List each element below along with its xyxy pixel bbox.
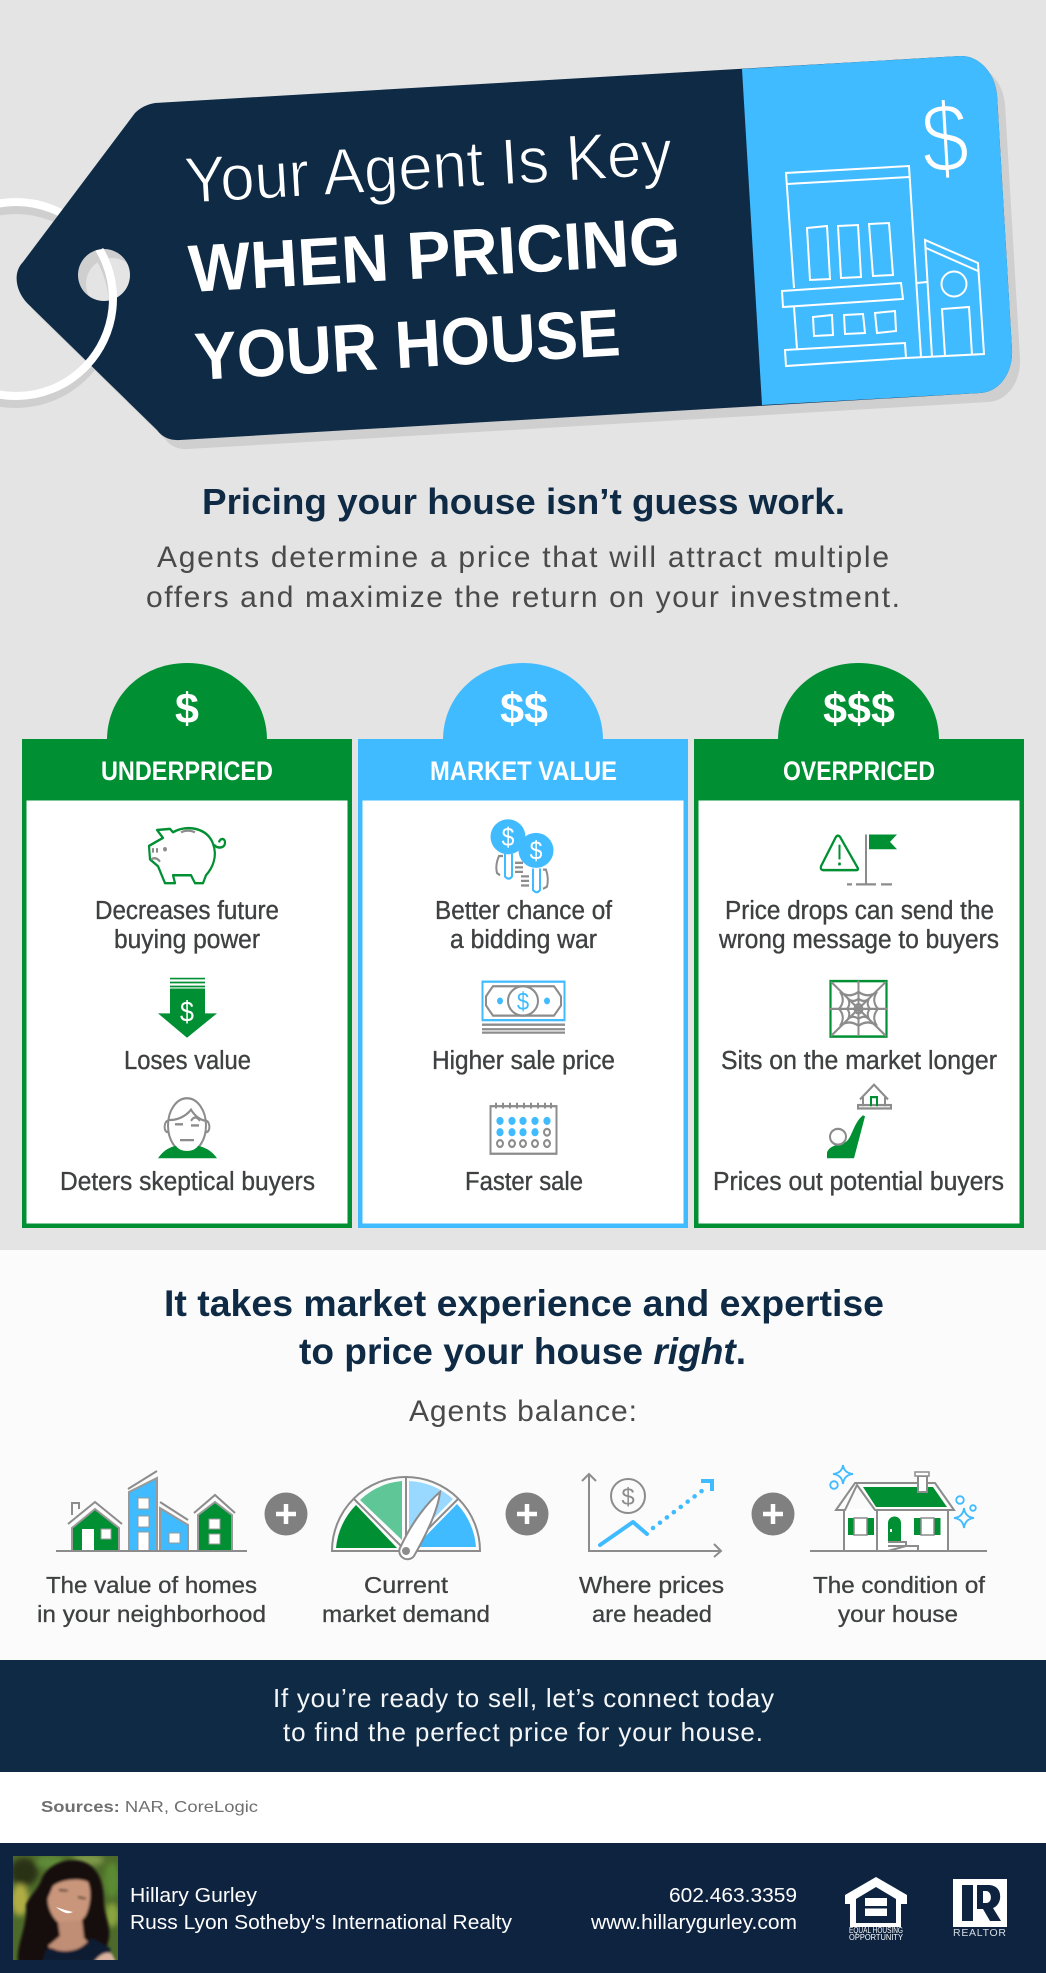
intro text: Agents determine a price that will attract multiple [157, 541, 889, 574]
factor label: The condition of [813, 1572, 986, 1598]
factor label [322, 1572, 490, 1627]
item text: a bidding war [450, 926, 597, 954]
subheading: Agents balance: [409, 1395, 637, 1428]
item text: buying power [114, 926, 260, 954]
icon: skeptical person [158, 1098, 217, 1158]
price symbol: $$ [500, 685, 548, 733]
card frame [22, 739, 352, 1228]
icon: spider web [830, 981, 887, 1037]
item text: Decreases future [95, 897, 279, 925]
icon: neighborhood homes [56, 1471, 247, 1551]
section heading: It takes market experience and expertise [164, 1283, 884, 1324]
icon: plus [264, 1492, 308, 1536]
factor label [37, 1572, 266, 1627]
card frame [358, 739, 688, 1228]
factor label [813, 1572, 986, 1627]
icon: dollar sign: $ [918, 81, 972, 194]
panel: agents balance [0, 1250, 1046, 1660]
item text: Deters skeptical buyers [60, 1168, 315, 1196]
icon: down arrow: $ [180, 996, 194, 1028]
item text: Faster sale [465, 1168, 583, 1196]
item text: Price drops can send the [725, 897, 994, 925]
agent photo [10, 1854, 120, 1962]
panel: market value [358, 663, 688, 1228]
factor label: The value of homes [46, 1572, 257, 1598]
phone: 602.463.3359 [669, 1885, 797, 1907]
icon: down arrow [158, 978, 217, 1038]
icon: house out of reach from seat [827, 1085, 891, 1158]
tag body [17, 56, 1012, 440]
card heading: MARKET VALUE [430, 756, 617, 786]
dome [443, 663, 603, 740]
icon: realtor logo [953, 1879, 1007, 1939]
icon: plus [506, 1492, 548, 1536]
string shadow and back of string [0, 202, 113, 404]
factor label: Where prices [579, 1572, 724, 1598]
price symbol: $ [175, 685, 199, 733]
price symbol: $$$ [823, 685, 895, 733]
icon: equal housing opportunity: OPPORTUNITY [849, 1933, 904, 1942]
item text: Loses value [124, 1047, 251, 1075]
footer [0, 1843, 1046, 1973]
item text: Higher sale price [432, 1047, 615, 1075]
tag title line 1: Your Agent Is Key [183, 116, 674, 217]
icon: banknote [482, 982, 565, 1033]
website: www.hillarygurley.com [590, 1912, 797, 1934]
tag title line 2: WHEN PRICING [186, 203, 682, 307]
call to action band [0, 1660, 1046, 1772]
call to action text [273, 1683, 774, 1747]
factor label: market demand [322, 1601, 490, 1627]
factor label [579, 1572, 724, 1627]
icon: realtor logo: REALTOR [953, 1927, 1006, 1939]
factor label: your house [838, 1601, 958, 1627]
factor label: in your neighborhood [37, 1601, 266, 1627]
panel: overpriced [694, 663, 1024, 1228]
agent name: Hillary Gurley [130, 1885, 257, 1907]
call to action text: to find the perfect price for your house. [283, 1717, 763, 1747]
panel: underpriced [22, 663, 352, 1228]
intro heading: Pricing your house isn’t guess work. [202, 481, 845, 522]
section heading [164, 1283, 884, 1372]
icon: bidding paddles: $ [530, 837, 543, 866]
item text: Better chance of [435, 897, 613, 925]
call to action text: If you’re ready to sell, let’s connect today [273, 1683, 774, 1713]
icon: calendar [490, 1103, 556, 1154]
icon: warning and flag [821, 835, 897, 884]
sources text: Sources: NAR, CoreLogic [41, 1799, 258, 1816]
sources band [0, 1772, 1046, 1843]
intro text: offers and maximize the return on your investment. [146, 581, 900, 614]
tag shadow [25, 65, 1020, 449]
dome [107, 663, 267, 740]
tag blue end [742, 56, 1012, 405]
icon: bidding paddles [490, 819, 554, 892]
price tag banner [0, 56, 1020, 449]
card heading: OVERPRICED [783, 756, 935, 786]
dome [778, 663, 939, 740]
icon: demand gauge [332, 1477, 480, 1559]
section heading: to price your house right. [299, 1331, 746, 1372]
intro text [146, 541, 900, 614]
card heading: UNDERPRICED [101, 756, 273, 786]
icon: sparkling house [810, 1465, 987, 1551]
item text: Sits on the market longer [721, 1047, 997, 1075]
card frame [694, 739, 1024, 1228]
icon: plus [752, 1492, 794, 1536]
item text: wrong message to buyers [718, 926, 999, 954]
agent company: Russ Lyon Sotheby's International Realty [130, 1912, 512, 1934]
icon: building outline [782, 166, 984, 366]
tag title line 3: YOUR HOUSE [192, 295, 622, 395]
item text: Prices out potential buyers [713, 1168, 1004, 1196]
icon: equal housing opportunity [845, 1877, 907, 1942]
factor label: are headed [592, 1601, 712, 1627]
icon: banknote: $ [517, 988, 529, 1015]
string in front of tag [87, 250, 113, 365]
icon: equal housing opportunity: EQUAL HOUSING [849, 1926, 903, 1935]
factor label: Current [364, 1572, 449, 1598]
icon: price trend chart: $ [621, 1484, 635, 1511]
icon: piggy bank [149, 828, 225, 883]
icon: bidding paddles: $ [502, 824, 515, 852]
icon: price trend chart [582, 1474, 721, 1557]
